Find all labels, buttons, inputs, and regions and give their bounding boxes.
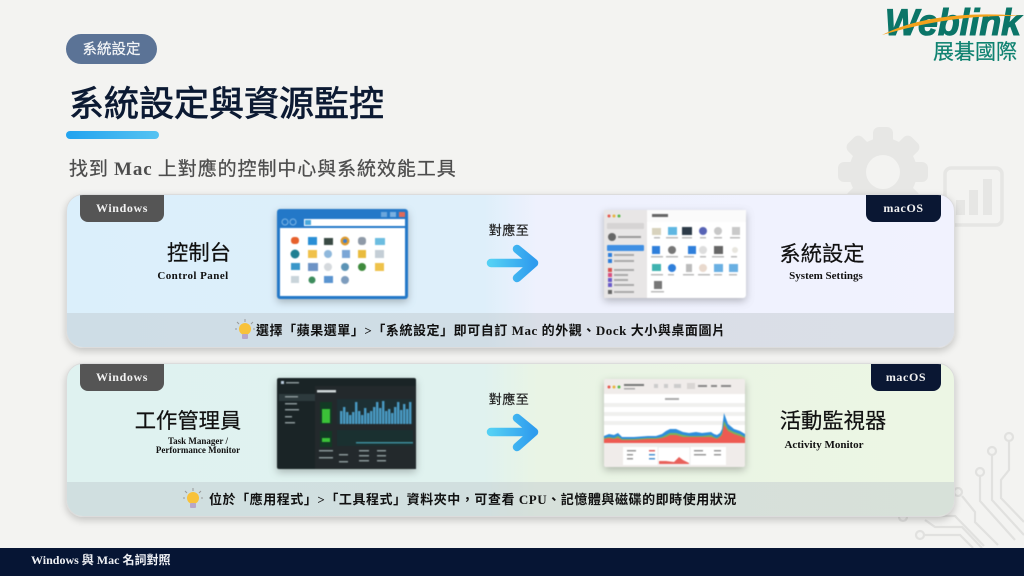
arrow: top (486, 244, 538, 282)
title: 系統設定與資源監控 (69, 76, 384, 127)
title underline (66, 131, 159, 139)
logo: Weblink (882, 2, 1024, 64)
logo: Weblink: Weblink (885, 2, 1023, 43)
tag: section label (66, 34, 157, 64)
heading: 工作管理員: 工作管理員 (135, 404, 241, 435)
arrow: bottom (486, 414, 538, 452)
label: System Settings: System Settings (789, 270, 863, 282)
subtitle: 找到 Mac 上對應的控制中心與系統效能工具 (69, 154, 457, 181)
tab: Windows: Windows (96, 370, 148, 384)
screenshot: Windows task manager (272, 376, 420, 476)
panel: control panel vs system settings (66, 194, 955, 348)
label: Task Manager / Performance Monitor (156, 436, 240, 455)
tip text: bottom: 位於「應用程式」>「工具程式」資料夾中，可查看 CPU、記憶體與磁碟的即時使用狀況 (209, 492, 737, 507)
tip strip (67, 482, 954, 516)
screenshot: Windows control panel (272, 208, 412, 306)
label: 對應至 (top): 對應至 (489, 220, 529, 239)
tab: macOS (866, 195, 941, 222)
label: Task Manager / Performance Monitor: Task Manager / (168, 436, 228, 446)
tab: macOS: macOS (883, 201, 924, 215)
heading: 活動監視器: 活動監視器 (780, 404, 886, 435)
tag: section label: 系統設定 (82, 38, 140, 59)
panel: task manager vs activity monitor (66, 363, 955, 517)
label: 對應至 (bottom): 對應至 (489, 389, 529, 408)
label: Control Panel: Control Panel (157, 270, 229, 282)
icon: light bulb (top) (235, 319, 255, 339)
tab: macOS: macOS (886, 370, 926, 384)
label: Activity Monitor: Activity Monitor (784, 439, 864, 451)
tip strip (67, 313, 954, 347)
screenshot: macOS activity monitor (600, 378, 750, 474)
tab: Windows (80, 364, 164, 391)
heading: 系統設定: 系統設定 (779, 237, 865, 268)
tab: macOS (871, 364, 941, 391)
tab: Windows: Windows (96, 201, 148, 215)
tab: Windows (80, 195, 164, 222)
footer bar: Windows 與 Mac 名詞對照 (31, 553, 170, 567)
footer bar (0, 548, 1024, 576)
icon: light bulb (bottom) (183, 488, 203, 508)
heading: 控制台: 控制台 (167, 236, 231, 267)
screenshot: macOS system settings (600, 208, 750, 306)
tip text: top: 選擇「蘋果選單」>「系統設定」即可自訂 Mac 的外觀、Dock 大小與桌面圖片 (256, 323, 726, 338)
label: Task Manager / Performance Monitor: Performance Monitor (156, 445, 240, 455)
